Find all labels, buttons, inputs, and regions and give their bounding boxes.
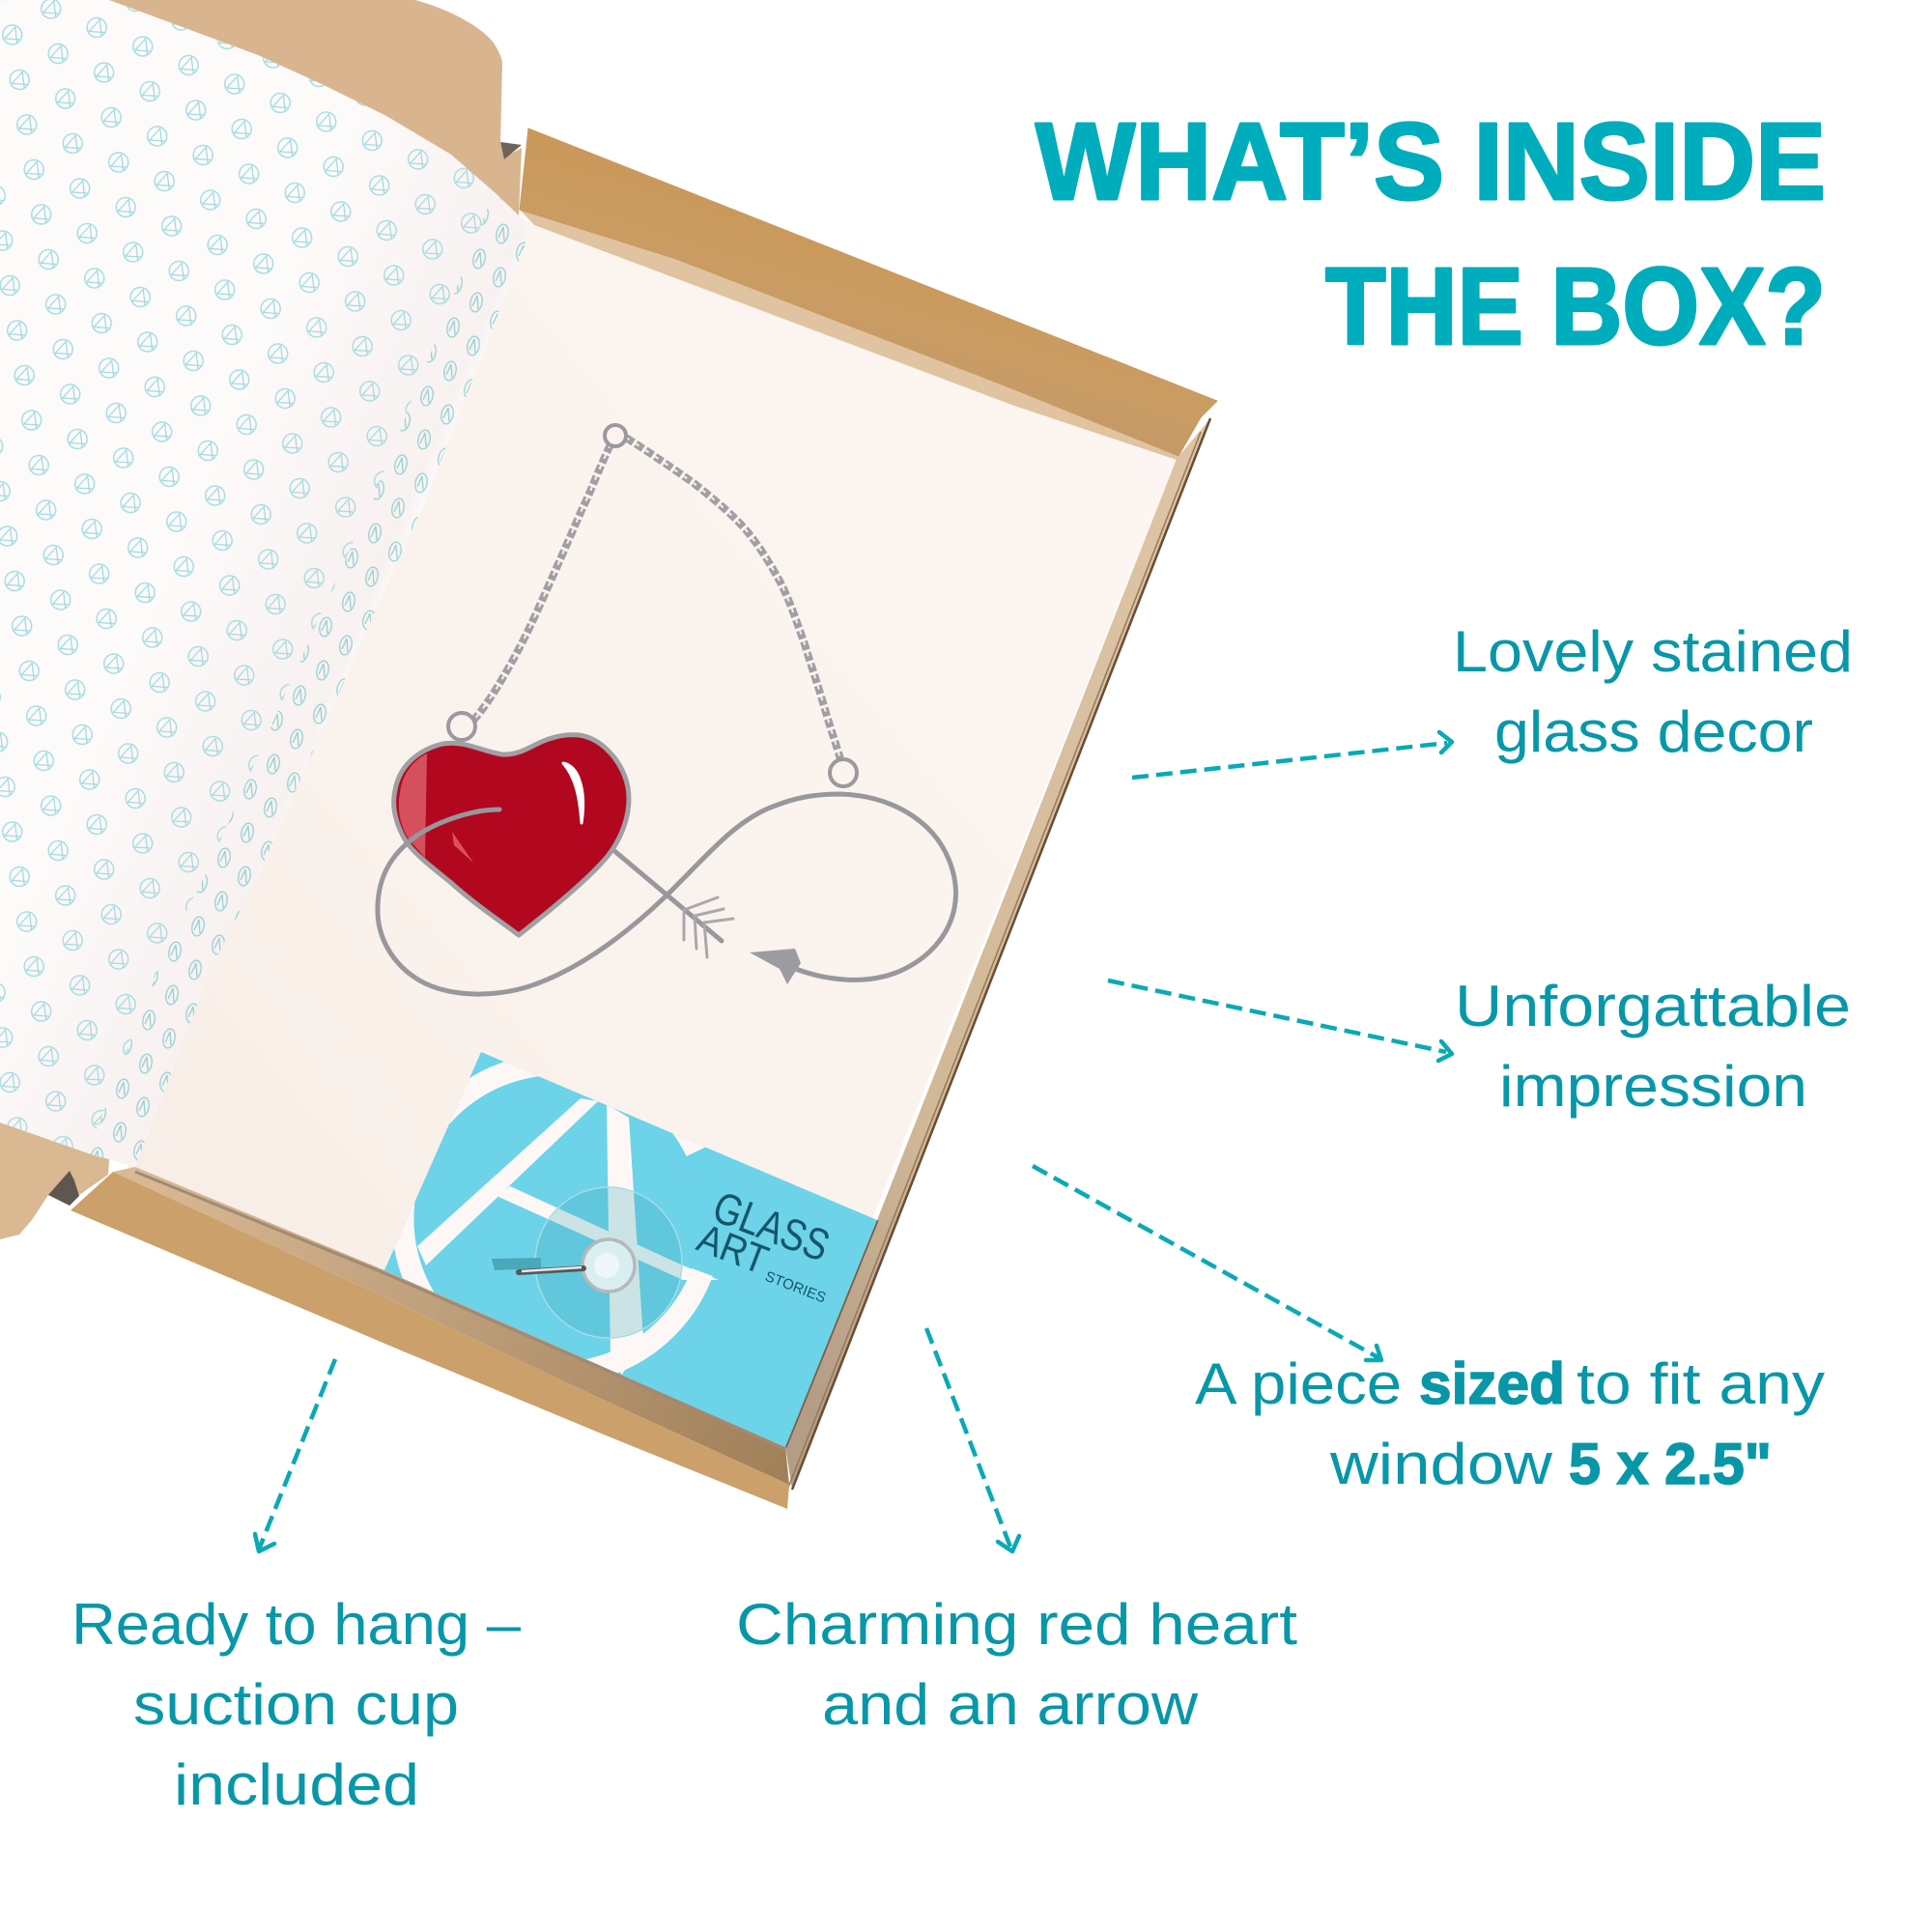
text: impression: impression — [1499, 1054, 1807, 1119]
arrow shaft and fletching — [613, 850, 733, 957]
text: suction cup: suction cup — [133, 1672, 459, 1737]
text: size line one: to fit any — [1577, 1351, 1825, 1416]
title — [1036, 100, 1826, 367]
text: size line one: sized — [1419, 1351, 1565, 1416]
business card — [384, 1052, 877, 1447]
foam edge line — [135, 1172, 785, 1449]
arrow: to stained glass label — [1132, 732, 1452, 778]
box top wall — [520, 128, 1217, 456]
card large logo — [403, 1065, 719, 1375]
box lid flap bottom — [0, 1122, 109, 1239]
card wordmark: GLASS — [706, 1181, 837, 1271]
title: THE BOX? — [1325, 245, 1826, 367]
paper logo pattern — [0, 0, 496, 1154]
text: stained glass: Lovely stained — [1453, 619, 1853, 684]
box lid flap top — [109, 0, 522, 222]
box right wall outer edge — [792, 418, 1210, 1490]
arrow: to size label — [1033, 1166, 1381, 1360]
stained glass ornament — [378, 425, 955, 994]
card wordmark — [692, 1181, 837, 1306]
text: size line one: A piece — [1195, 1351, 1402, 1416]
callout: heart and arrow — [736, 1328, 1297, 1737]
callout: size — [1033, 1166, 1825, 1496]
text: size line two: 5 x 2.5" — [1569, 1432, 1772, 1496]
panel: open box — [0, 0, 1217, 1509]
box bottom wall — [71, 1172, 789, 1509]
box bottom wall inner — [113, 1167, 789, 1485]
top wall inner strip — [520, 210, 1179, 460]
heart — [394, 735, 629, 935]
text: suction cup — [71, 1592, 522, 1817]
callout: stained glass — [1132, 619, 1853, 778]
chain rings — [448, 425, 857, 786]
text: heart and arrow — [736, 1592, 1297, 1737]
card edge shadow — [785, 1220, 877, 1447]
text: size line one — [1195, 1351, 1825, 1416]
tissue paper — [0, 0, 531, 1167]
text: size line two — [1329, 1432, 1772, 1496]
text: impression — [1455, 974, 1851, 1119]
card wordmark: STORIES — [763, 1268, 828, 1306]
chain — [473, 438, 840, 759]
foam insert — [126, 213, 1177, 1447]
text: size line two: window — [1329, 1432, 1553, 1496]
arrow: to impression label — [1108, 980, 1452, 1061]
infinity loop — [378, 794, 955, 994]
card wordmark: ART — [692, 1215, 775, 1283]
text: heart and arrow: Charming red heart — [736, 1592, 1297, 1657]
callout: impression — [1108, 974, 1851, 1119]
title: WHAT’S INSIDE — [1036, 100, 1826, 222]
arrow: to heart label — [926, 1328, 1019, 1551]
text: suction cup: Ready to hang – — [71, 1592, 522, 1657]
arrow: to suction cup label — [255, 1359, 335, 1551]
text: suction cup: included — [174, 1752, 419, 1817]
suction cup — [492, 1187, 682, 1338]
box right wall inner crease — [788, 432, 1201, 1488]
paper fold shading — [0, 0, 531, 1167]
paper sheet — [0, 0, 531, 1167]
lid notch — [500, 142, 522, 159]
flap notch — [48, 1171, 79, 1206]
text: stained glass: glass decor — [1494, 699, 1813, 764]
arrow head — [750, 949, 801, 984]
box right wall — [785, 418, 1210, 1490]
card base — [384, 1052, 877, 1447]
text: impression: Unforgattable — [1455, 974, 1851, 1038]
text: stained glass — [1453, 619, 1853, 764]
callout: suction cup — [71, 1359, 522, 1817]
text: heart and arrow: and an arrow — [822, 1672, 1199, 1737]
paper fold pattern — [87, 193, 531, 1167]
